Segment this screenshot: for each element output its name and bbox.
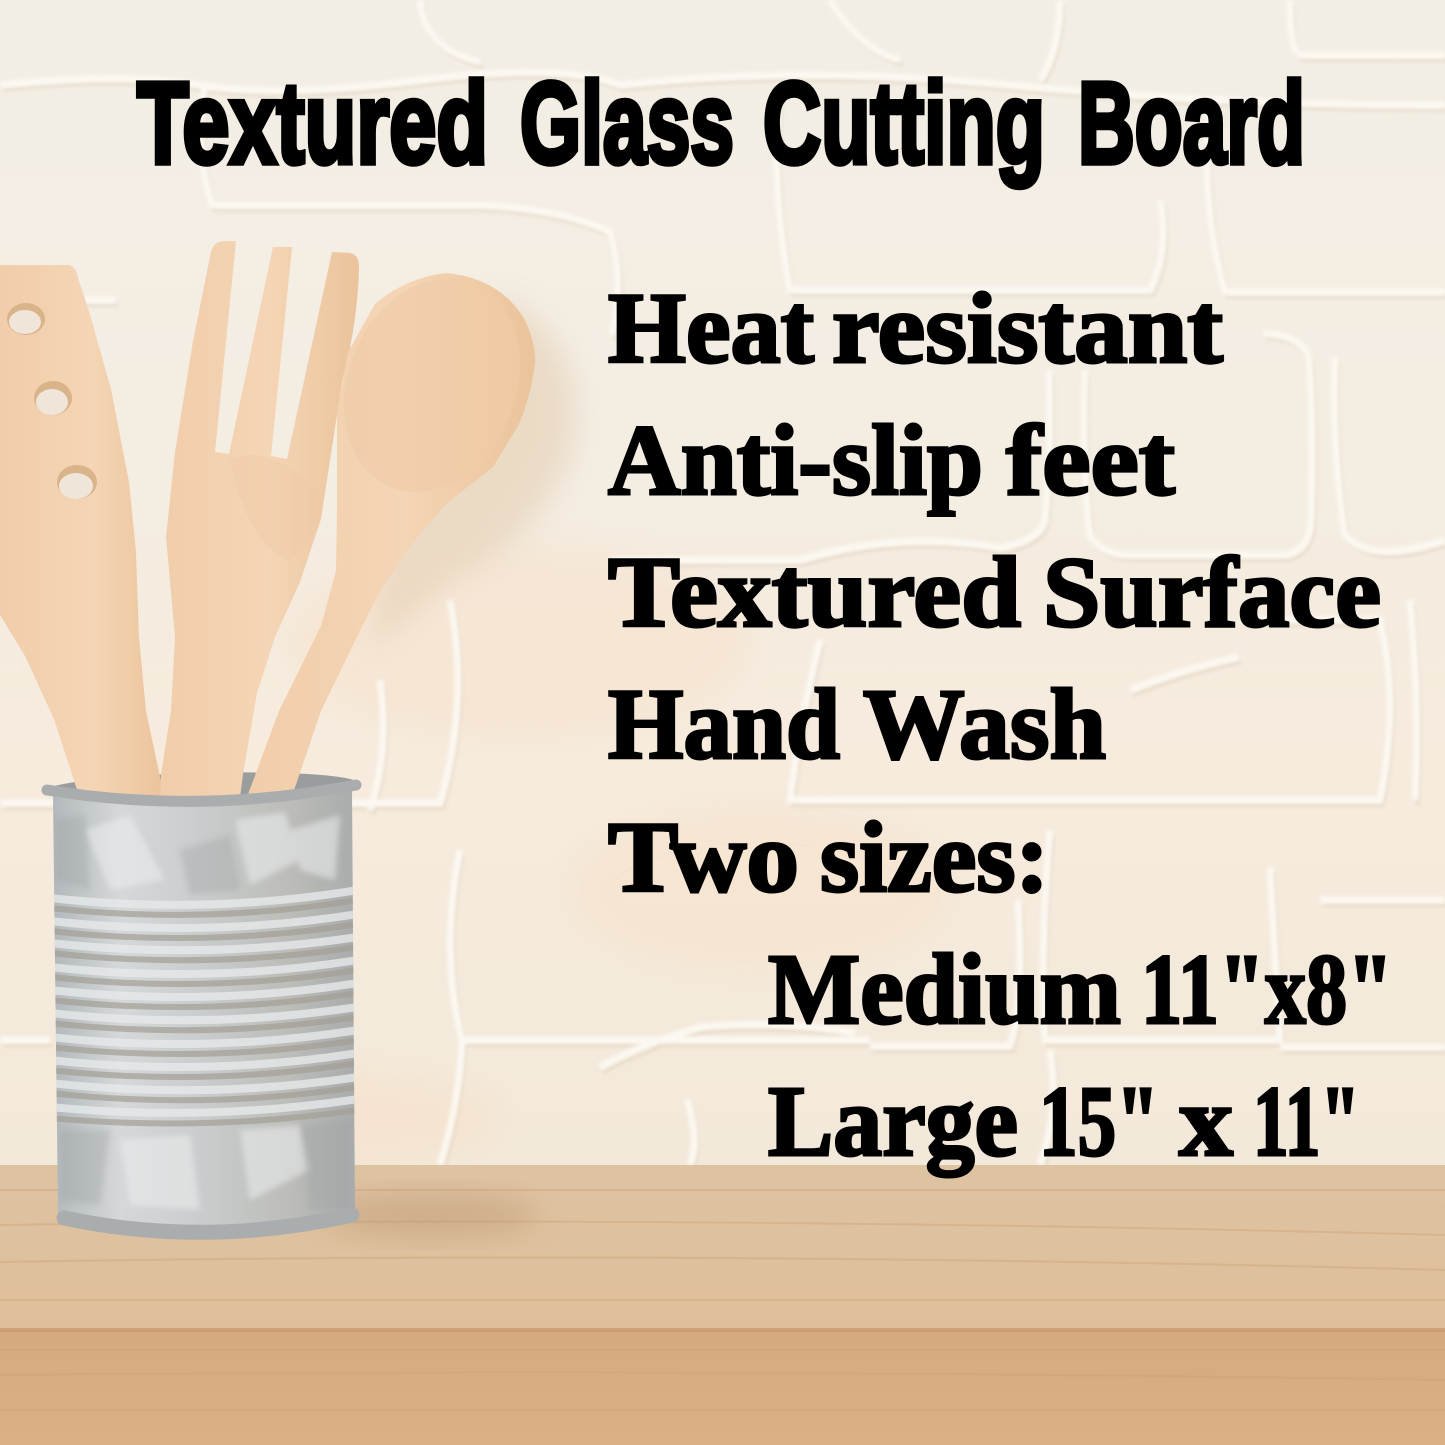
feature: heat resistant: Heat xyxy=(608,272,814,384)
size: large: x xyxy=(1179,1065,1233,1177)
size: large: Large xyxy=(768,1065,1018,1177)
feature: hand wash xyxy=(608,668,1106,780)
feature: two sizes: sizes: xyxy=(820,801,1049,913)
icon: wooden spoon xyxy=(244,252,551,805)
feature: two sizes xyxy=(608,801,1049,913)
title: Textured xyxy=(137,58,488,188)
feature: hand wash: Hand xyxy=(608,668,840,780)
feature: textured surface: Textured xyxy=(608,536,1021,648)
title: Glass xyxy=(520,58,734,188)
feature: hand wash: Wash xyxy=(863,668,1106,780)
feature: two sizes: Two xyxy=(608,801,799,913)
feature: heat resistant xyxy=(608,272,1223,384)
icon: galvanized tin can xyxy=(47,785,358,1232)
size: large xyxy=(768,1065,1360,1177)
feature: anti-slip feet: feet xyxy=(1006,404,1175,516)
feature: heat resistant: resistant xyxy=(832,272,1223,384)
size: medium xyxy=(768,933,1393,1045)
icon: wooden fork xyxy=(160,241,359,805)
size: large: 11" xyxy=(1253,1065,1360,1177)
feature: anti-slip feet xyxy=(608,404,1175,516)
title xyxy=(137,58,1305,188)
feature: textured surface: Surface xyxy=(1043,536,1381,648)
size: medium: 11"x8" xyxy=(1141,933,1393,1045)
feature: anti-slip feet: Anti-slip xyxy=(608,404,983,516)
size: medium: Medium xyxy=(768,933,1121,1045)
utensil shadow on wall xyxy=(370,300,574,650)
feature: textured surface xyxy=(608,536,1381,648)
icon: slotted spatula xyxy=(0,265,166,805)
title: Board xyxy=(1078,58,1305,188)
can interior xyxy=(45,769,357,805)
size: large: 15" xyxy=(1039,1065,1159,1177)
table top xyxy=(0,1165,1445,1445)
title: Cutting xyxy=(763,58,1045,188)
